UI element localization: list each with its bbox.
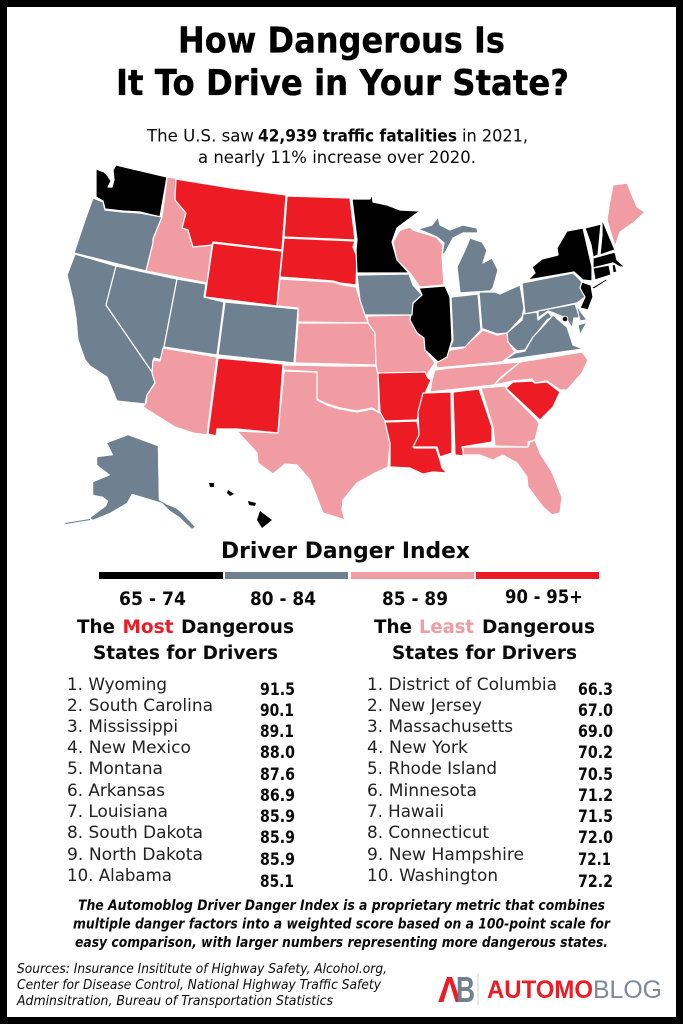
North Dakota [284, 196, 355, 240]
Massachusetts [593, 252, 625, 268]
list: most dangerous state names: 8. South Dakota [67, 823, 203, 842]
Wyoming [205, 243, 282, 306]
Montana [175, 179, 286, 250]
legend labels [119, 587, 583, 610]
Rhode Island [612, 264, 617, 273]
heading: most dangerous: Dangerous [181, 617, 294, 638]
title [116, 20, 569, 104]
Louisiana [385, 421, 447, 474]
methodology note: multiple danger factors into a weighted score based on a 100-point scale for [73, 916, 611, 932]
list: least dangerous scores: 70.5 [578, 765, 613, 785]
list: least dangerous state names [367, 675, 557, 885]
list: least dangerous scores: 72.1 [578, 850, 611, 870]
map: United States by driver danger index [65, 165, 645, 529]
list: most dangerous state names: 4. New Mexico [67, 738, 191, 757]
list: least dangerous state names: 4. New York [367, 738, 468, 757]
Pennsylvania [522, 273, 585, 314]
list: most dangerous scores: 85.9 [260, 828, 295, 848]
list: least dangerous state names: 10. Washington [367, 866, 498, 885]
logo wordmark: BLOG [593, 976, 662, 1004]
list: most dangerous state names: 10. Alabama [67, 866, 172, 885]
list: least dangerous state names: 8. Connecticut [367, 823, 490, 842]
list: most dangerous scores: 90.1 [260, 701, 294, 721]
methodology note [73, 898, 611, 951]
list: most dangerous scores: 85.9 [260, 850, 295, 870]
heading: least dangerous: The [374, 617, 412, 638]
subtitle text: The U.S. saw [146, 126, 254, 146]
Florida [463, 440, 562, 515]
list: most dangerous scores: 91.5 [260, 680, 295, 700]
legend labels: 85 - 89 [382, 589, 448, 610]
list: most dangerous state names [67, 675, 213, 885]
New York [528, 228, 592, 281]
list: least dangerous state names: 9. New Hampshire [367, 845, 524, 864]
heading: least dangerous: Dangerous [482, 617, 595, 638]
Michigan lower peninsula [457, 238, 498, 293]
California [67, 254, 155, 404]
Michigan upper peninsula [418, 217, 478, 255]
list: least dangerous scores: 72.0 [578, 828, 613, 848]
Maryland [538, 304, 580, 328]
Hawaii [209, 483, 272, 528]
legend bar: 65 - 74 [99, 572, 223, 579]
list: least dangerous state names: 7. Hawaii [367, 802, 444, 821]
panel: least dangerous states [367, 617, 613, 892]
logo: Automoblog [438, 969, 662, 1010]
New Mexico [208, 358, 283, 436]
Minnesota [352, 194, 420, 273]
Kentucky [436, 330, 515, 368]
Ohio [479, 285, 524, 334]
Nebraska [277, 279, 368, 323]
list: most dangerous scores: 85.9 [260, 807, 295, 827]
South Carolina [506, 381, 560, 420]
logo mark [438, 969, 478, 1010]
Illinois [410, 286, 452, 362]
sources [16, 961, 387, 1009]
logo wordmark: AUTOMO [487, 976, 593, 1004]
list: most dangerous scores [260, 680, 295, 892]
legend heading: Driver Danger Index [221, 538, 470, 564]
list: least dangerous scores: 66.3 [578, 680, 613, 700]
title: How Dangerous Is [178, 20, 505, 62]
list: most dangerous scores: 88.0 [260, 743, 295, 763]
Iowa [357, 274, 422, 315]
Wisconsin [393, 227, 444, 287]
list: most dangerous state names: 5. Montana [67, 759, 163, 778]
Connecticut [593, 265, 611, 280]
list: least dangerous scores: 69.0 [578, 722, 613, 742]
panel: most dangerous states [67, 617, 295, 892]
list: most dangerous state names: 1. Wyoming [67, 675, 167, 694]
logo wordmark [487, 976, 662, 1004]
Oklahoma [283, 365, 379, 412]
subtitle text [146, 126, 528, 168]
subtitle text: a nearly 11% increase over 2020. [198, 148, 476, 168]
Arkansas [378, 372, 431, 421]
Delaware [576, 304, 587, 321]
Texas [237, 371, 390, 520]
Nevada [106, 266, 177, 372]
Virginia eastern shore [578, 322, 587, 335]
legend: Driver Danger Index [99, 538, 599, 610]
heading: most dangerous [77, 617, 294, 664]
list: least dangerous scores: 71.2 [578, 786, 613, 806]
title: It To Drive in Your State? [116, 63, 569, 104]
New Hampshire [600, 219, 615, 255]
list: most dangerous state names: 6. Arkansas [67, 781, 165, 800]
Kansas [295, 323, 376, 365]
legend labels: 80 - 84 [250, 589, 316, 610]
legend labels: 90 - 95+ [505, 587, 583, 608]
list: least dangerous scores: 70.2 [578, 743, 613, 763]
Utah [164, 279, 224, 355]
list: least dangerous scores: 67.0 [578, 701, 613, 721]
Colorado [218, 302, 298, 363]
North Carolina [494, 352, 588, 390]
sources: Sources: Insurance Insititute of Highway Safety, Alcohol.org, [17, 961, 387, 977]
list: least dangerous state names: 5. Rhode Island [367, 759, 497, 778]
list: least dangerous state names: 6. Minnesota [367, 781, 477, 800]
subtitle text: 42,939 traffic fatalities [258, 126, 457, 146]
list: most dangerous scores: 89.1 [260, 722, 294, 742]
list: least dangerous scores: 72.2 [578, 872, 613, 892]
sources: Adminsitration, Bureau of Transportation Statistics [16, 993, 333, 1009]
list: most dangerous state names: 2. South Carolina [67, 696, 213, 715]
list: most dangerous scores: 87.6 [260, 765, 295, 785]
legend labels: 65 - 74 [119, 589, 186, 610]
list: most dangerous scores: 86.9 [260, 786, 295, 806]
subtitle text: in 2021, [462, 126, 528, 146]
legend bar: 90 - 95+ [476, 572, 599, 579]
legend bar: 80 - 84 [225, 572, 348, 579]
New York: Long Island [591, 279, 608, 289]
Mississippi [413, 392, 452, 457]
Tennessee [430, 362, 520, 392]
logo mark: Λ [438, 969, 461, 1010]
District of Columbia [562, 316, 568, 322]
list: least dangerous scores [578, 680, 613, 892]
Arizona [143, 348, 217, 435]
Virginia [505, 315, 583, 360]
logo mark: B [456, 969, 475, 1010]
heading: most dangerous: States for Drivers [93, 643, 278, 664]
heading: least dangerous: States for Drivers [392, 643, 577, 664]
heading: most dangerous: The [77, 617, 115, 638]
Vermont [585, 224, 601, 257]
list: most dangerous scores: 85.1 [260, 872, 294, 892]
Idaho [146, 177, 212, 283]
heading: least dangerous [374, 617, 595, 664]
list: most dangerous state names: 7. Louisiana [67, 802, 168, 821]
methodology note: easy comparison, with larger numbers representing more dangerous states. [75, 935, 608, 951]
South Dakota [280, 238, 357, 285]
Alabama [453, 389, 492, 456]
Maine [607, 183, 645, 247]
Missouri [367, 315, 435, 378]
list: least dangerous scores: 71.5 [578, 807, 613, 827]
methodology note: The Automoblog Driver Danger Index is a proprietary metric that combines [78, 898, 605, 914]
legend bar: 85 - 89 [351, 572, 474, 579]
list: most dangerous state names: 3. Mississippi [67, 717, 178, 736]
list: most dangerous state names: 9. North Dakota [67, 845, 203, 864]
Alaska [65, 435, 195, 529]
list: least dangerous state names: 3. Massachusetts [367, 717, 513, 736]
West Virginia [507, 312, 552, 351]
Georgia [481, 386, 539, 447]
list: least dangerous state names: 2. New Jersey [367, 696, 482, 715]
New Jersey [580, 282, 593, 310]
Oregon [74, 198, 162, 271]
list: least dangerous state names: 1. District of Columbia [367, 675, 557, 694]
heading: most dangerous: Most [122, 617, 174, 638]
Indiana [450, 294, 481, 348]
Washington [96, 165, 167, 217]
sources: Center for Disease Control, National Highway Traffic Safety [17, 977, 382, 993]
heading: least dangerous: Least [419, 617, 474, 638]
